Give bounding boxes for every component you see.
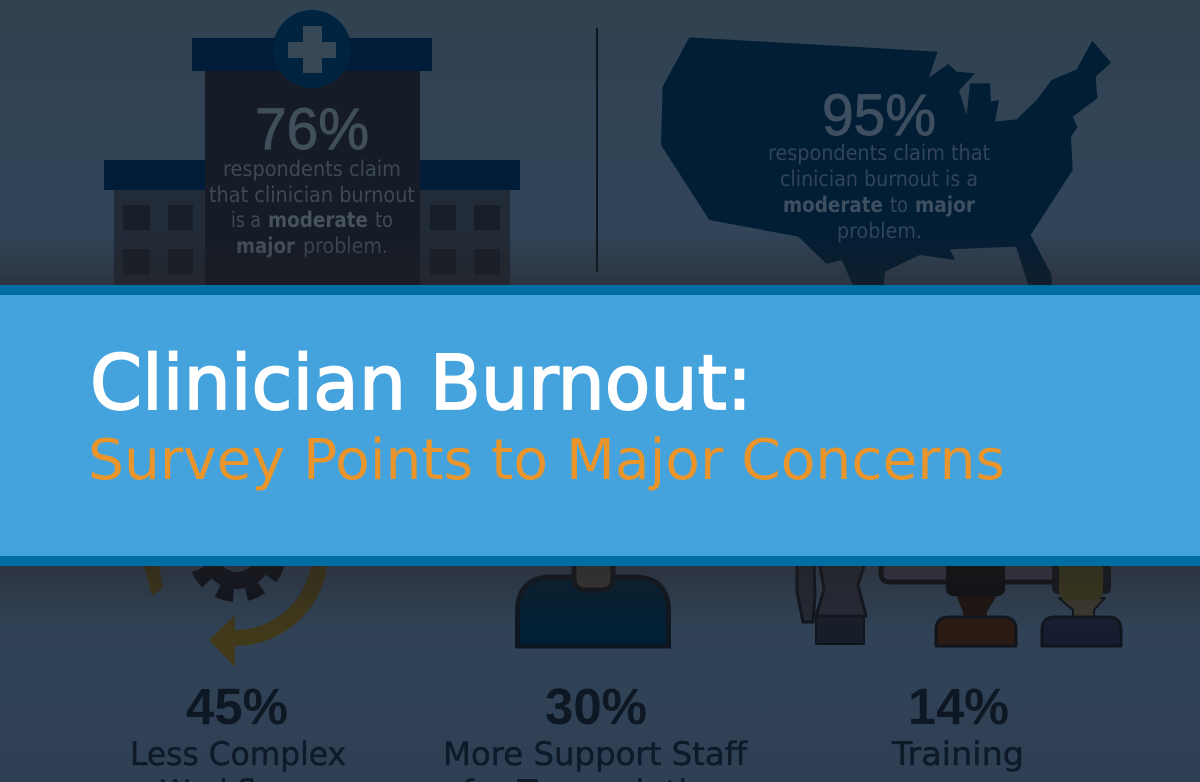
icon: usa map [661,37,1111,290]
title: Clinician Burnout: [90,338,752,427]
label: training: Training [891,735,1024,773]
icon: trainer and trainees [797,560,1121,646]
icon: gear with circular arrows [142,512,320,667]
label: more support staff: More Support Staff [443,735,748,773]
text: hospital description: to [375,208,393,232]
stat: 95%: 95% [822,83,936,148]
icon: person [518,560,668,646]
stat: 45%: 45% [186,678,288,735]
text: national description: moderate [783,193,883,217]
text: hospital description: moderate [268,208,368,232]
text: national description [768,141,990,243]
text: national description: respondents claim that [768,141,990,165]
subtitle: Survey Points to Major Concerns [88,428,1005,493]
text: national description: problem. [837,219,922,243]
title banner [0,285,1200,566]
stat: 76%: 76% [255,97,369,162]
icon: hospital building [104,10,520,290]
text: hospital description: that clinician burnout [209,183,415,207]
text: hospital description: respondents claim [223,157,401,181]
text: national description: clinician burnout is a [780,167,978,191]
column: less complex workflows [130,512,346,782]
text: hospital description: problem. [303,234,388,258]
text: national description: to [890,193,908,217]
label: less complex workflows: Less Complex [130,735,346,773]
text: hospital description: is a [231,208,261,232]
stat: 14%: 14% [908,678,1009,735]
usa map panel [661,37,1111,290]
column: training [797,560,1121,773]
text: hospital description: major [236,234,296,258]
text: hospital description [209,157,415,258]
text: national description: major [915,193,976,217]
stat: 30%: 30% [545,678,647,735]
column: more support staff [443,560,748,782]
hospital panel [104,10,520,290]
